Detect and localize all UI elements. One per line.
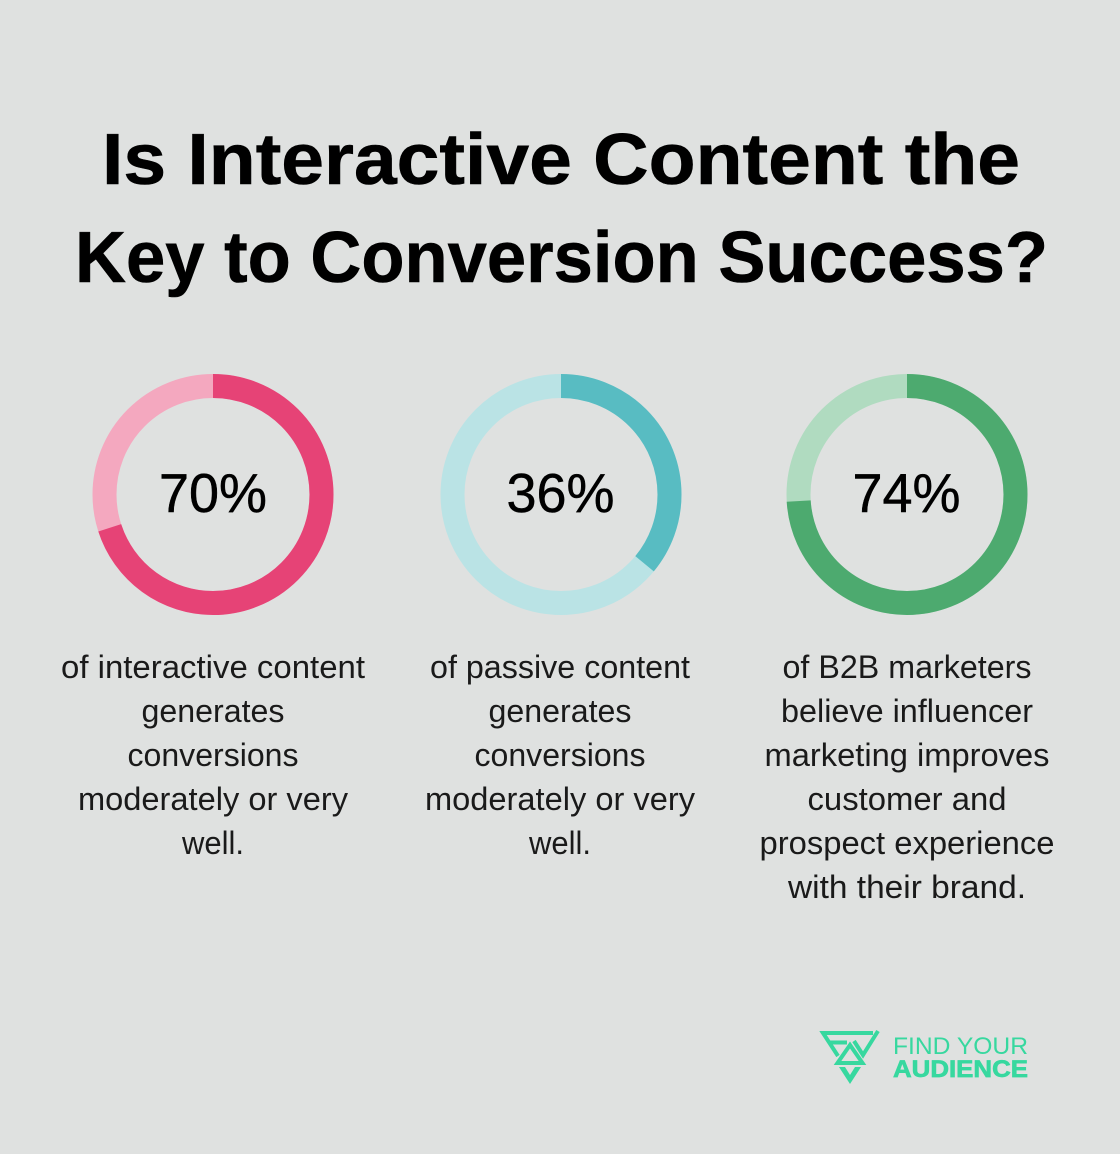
value: 70%: 70% [159,462,267,524]
description: interactive content: conversions [128,737,298,773]
title: Key to Conversion Success? [75,218,1048,298]
description: passive content: conversions [474,737,646,773]
icon: triangle mark [823,1031,878,1084]
description: B2B marketers: believe influencer [781,693,1033,729]
description: passive content: moderately or very [425,781,695,817]
description: B2B marketers: of B2B marketers [782,649,1032,685]
description: B2B marketers: prospect experience [760,825,1054,861]
description: interactive content [61,649,365,861]
wordmark: FIND YOUR [893,1033,1028,1060]
logo: Find Your Audience [823,1031,1028,1084]
title: Is Interactive Content the [102,120,1020,200]
donut chart: 70% [104,386,322,603]
description: passive content [425,649,695,861]
title [75,120,1048,298]
description: B2B marketers: marketing improves [764,737,1050,773]
description: passive content: generates [488,693,632,729]
description: B2B marketers: with their brand. [787,869,1026,905]
wordmark: AUDIENCE [893,1056,1028,1083]
value: 36%: 36% [506,462,614,524]
description: B2B marketers: customer and [808,781,1006,817]
donut chart: 36% [452,386,670,603]
description: passive content: well. [528,825,591,861]
description: passive content: of passive content [430,649,690,685]
panel: 70% interactive content [61,386,365,861]
panel: 74% B2B marketers [760,386,1054,905]
description: interactive content: generates [142,693,284,729]
description: interactive content: moderately or very [78,781,348,817]
description: interactive content: of interactive content [61,649,365,685]
wordmark [893,1033,1028,1083]
value: 74%: 74% [852,462,960,524]
description: interactive content: well. [181,825,244,861]
description: B2B marketers [760,649,1054,905]
donut chart: 74% [798,386,1016,603]
panel: 36% passive content [425,386,695,861]
